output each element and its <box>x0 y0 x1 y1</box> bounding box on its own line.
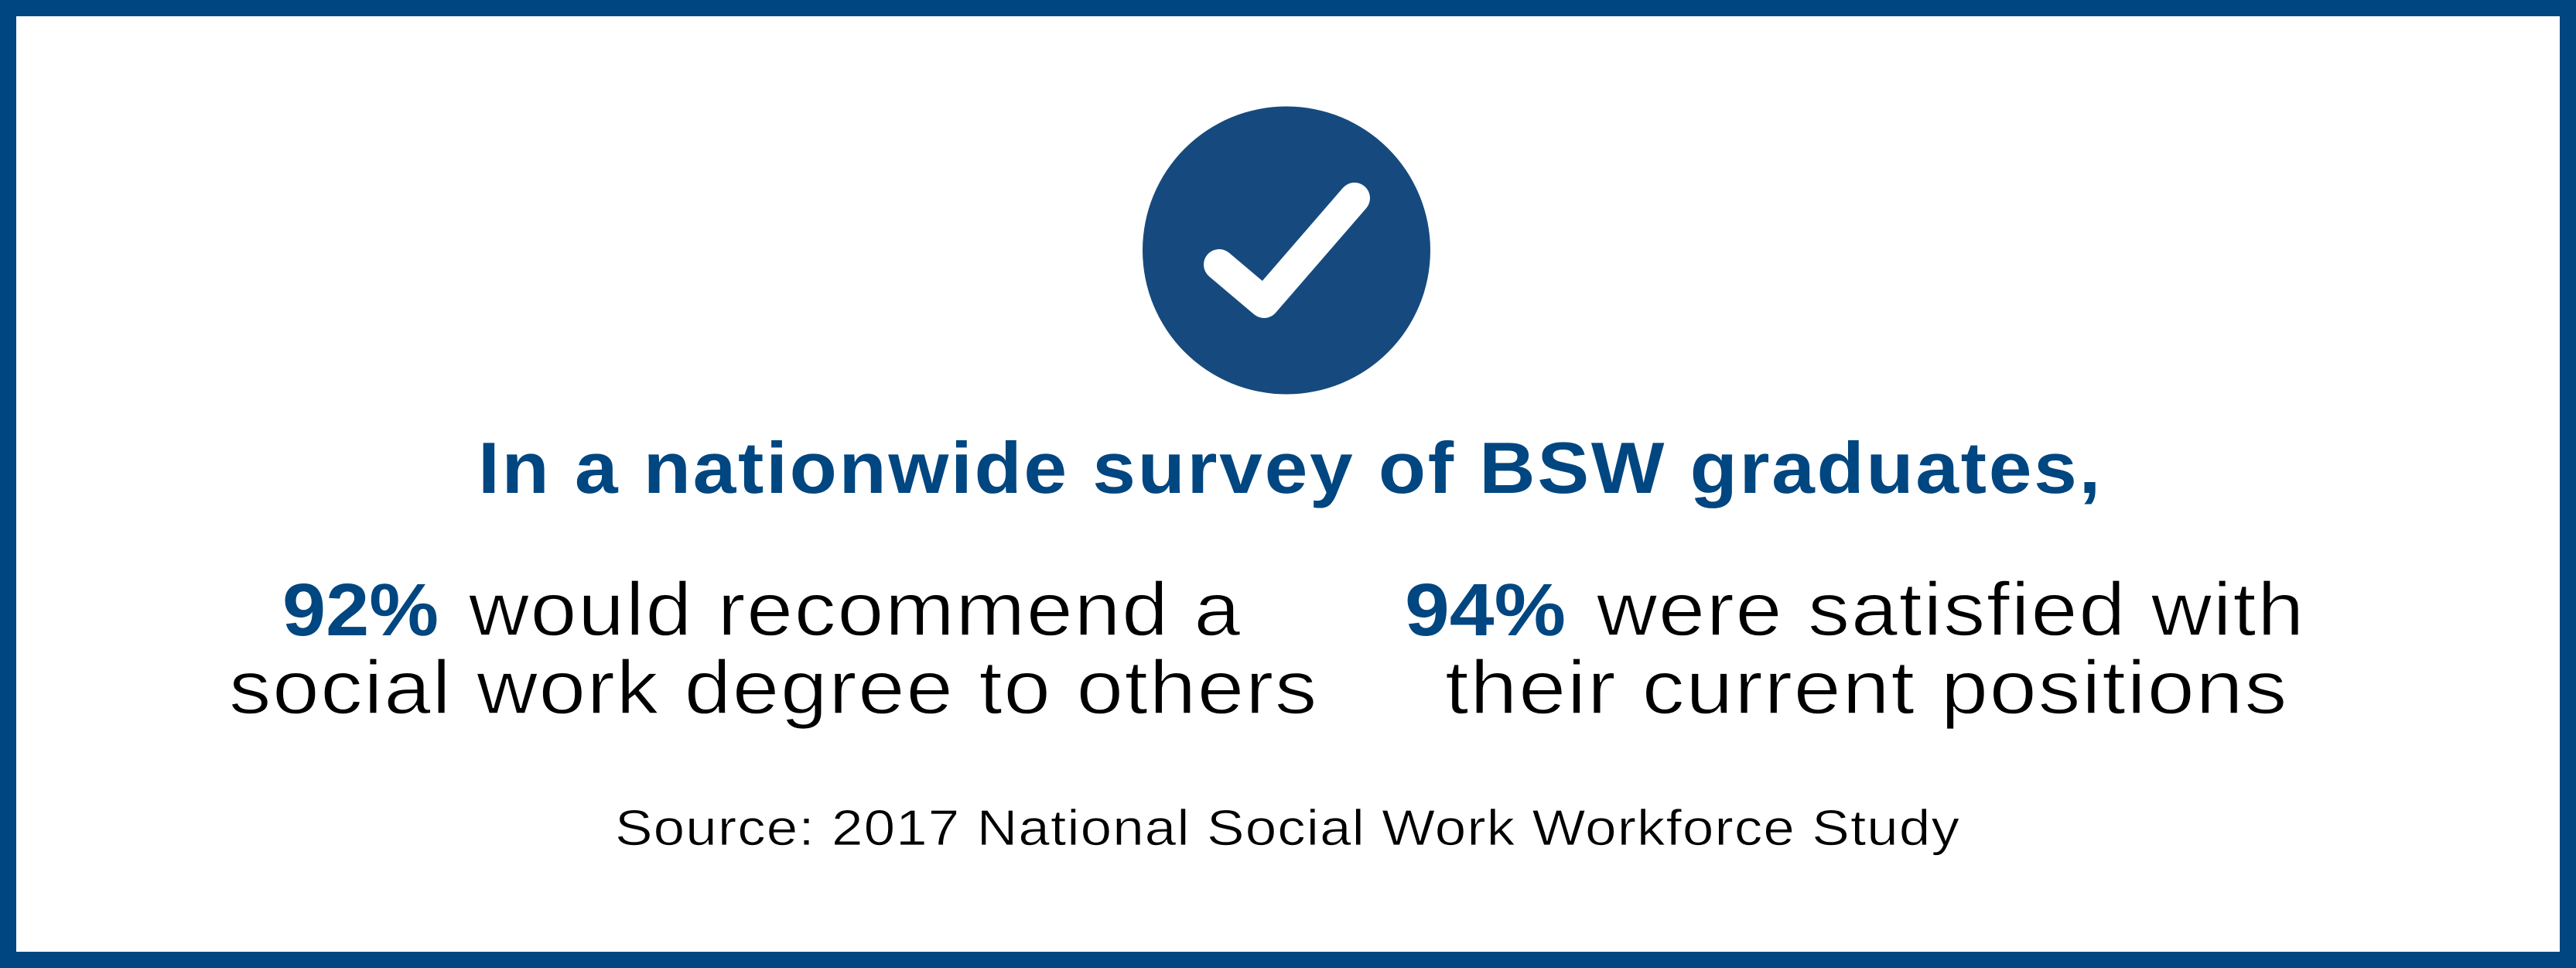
statistic: 94% satisfied: 94% <box>1405 569 1566 652</box>
statistic: 94% satisfied <box>1405 566 2305 730</box>
statistic: 92% recommend: social work degree to others <box>229 645 1318 730</box>
statistic: 92% recommend <box>229 566 1318 730</box>
statistic: 94% satisfied: their current positions <box>1445 645 2288 730</box>
statistic: 92% recommend: would recommend a <box>468 566 1242 652</box>
statistic: 94% satisfied: were satisfied with <box>1596 566 2305 652</box>
statistic: 92% recommend: 92% <box>282 569 439 652</box>
source note: Source: 2017 National Social Work Workforce Study <box>615 799 1960 856</box>
icon: check mark in circle <box>1143 107 1430 395</box>
heading: In a nationwide survey of BSW graduates, <box>478 427 2103 508</box>
